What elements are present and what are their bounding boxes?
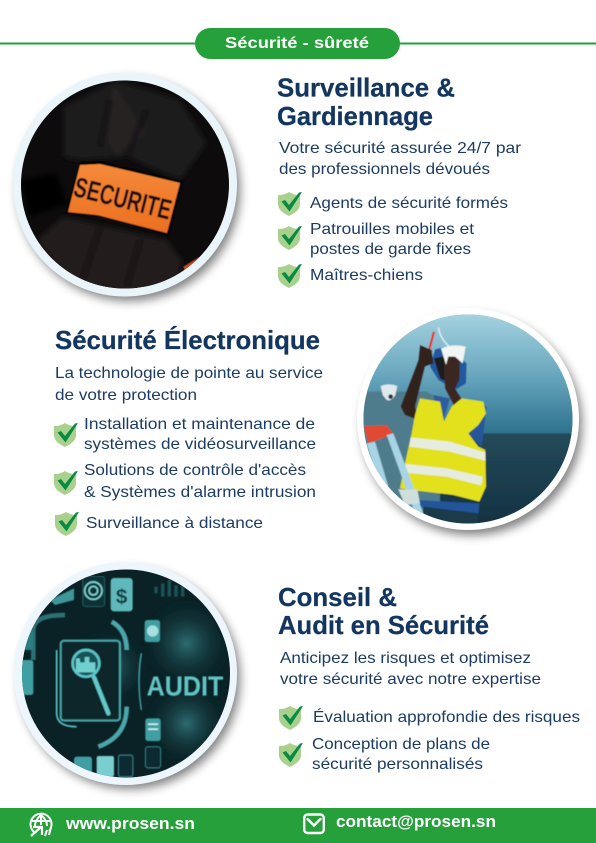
icon: globe <box>31 814 52 836</box>
header pill: Sécurité - sûreté <box>225 35 369 52</box>
icon: envelope <box>304 814 324 833</box>
intro text: votre sécurité avec notre expertise <box>280 671 541 688</box>
bullet: acces: Solutions de contrôle d'accès <box>84 462 306 479</box>
intro text: La technologie de pointe au service <box>55 365 323 382</box>
heading: surveillance: Gardiennage <box>277 101 433 131</box>
text: website: www.prosen.sn <box>65 814 195 833</box>
heading: electronique: Sécurité Électronique <box>55 325 320 355</box>
intro text: Votre sécurité assurée 24/7 par <box>279 140 522 157</box>
bullet: video: systèmes de vidéosurveillance <box>84 436 316 453</box>
bullet: acces <box>84 462 316 501</box>
heading: surveillance <box>277 72 455 131</box>
bullet: maitres-chiens: Maîtres-chiens <box>310 267 423 284</box>
section 2: electronique <box>54 325 323 536</box>
ladder <box>364 425 393 443</box>
photo: security armband <box>13 72 240 301</box>
bullet: evaluation: Évaluation approfondie des risques <box>313 707 580 726</box>
heading: conseil <box>278 582 489 640</box>
intro text <box>280 650 541 688</box>
bullet: agents: Agents de sécurité formés <box>310 195 508 212</box>
magnifier <box>73 650 99 677</box>
text: audit: AUDIT <box>147 671 223 702</box>
text: email: contact@prosen.sn <box>336 812 496 831</box>
icon: shield check <box>54 471 78 495</box>
header rule <box>0 42 596 44</box>
intro text: de votre protection <box>55 387 197 404</box>
bullet: distance: Surveillance à distance <box>86 515 263 532</box>
section 3: conseil <box>278 582 580 773</box>
dashboard tiles <box>111 578 133 611</box>
intro text: des professionnels dévoués <box>279 161 490 178</box>
heading: conseil: Conseil & <box>278 582 397 612</box>
icon: shield check <box>278 192 302 216</box>
helmet <box>430 347 467 390</box>
arms <box>401 345 433 420</box>
icon: shield check <box>279 743 303 767</box>
bullet: conception: sécurité personnalisés <box>312 756 483 773</box>
bullet: patrouilles: postes de garde fixes <box>310 241 471 258</box>
photo: technician installing camera <box>357 308 582 535</box>
bullet: video: Installation et maintenance de <box>84 416 315 433</box>
footer band <box>0 808 596 843</box>
icon: shield check <box>55 512 79 536</box>
icon: shield check <box>278 264 302 288</box>
bullet: conception <box>312 736 490 773</box>
header pill <box>195 28 400 59</box>
photo: security armband: SECURITE <box>71 171 175 226</box>
camera <box>381 384 397 400</box>
bullet: video <box>84 416 316 453</box>
heading: surveillance: Surveillance & <box>277 72 455 102</box>
bullet: patrouilles: Patrouilles mobiles et <box>310 221 475 238</box>
shirt <box>433 395 450 420</box>
icon: shield check <box>279 706 303 730</box>
intro text <box>279 140 522 178</box>
photo: audit dashboard: $ <box>116 585 128 608</box>
vest <box>400 398 486 502</box>
intro text <box>55 365 323 404</box>
icon: shield check <box>54 423 78 447</box>
bullet: patrouilles <box>310 221 475 258</box>
section 1: surveillance <box>277 72 522 288</box>
photo: audit dashboard <box>14 562 240 789</box>
bullet: acces: & Systèmes d'alarme intrusion <box>84 484 316 501</box>
bullet: conception: Conception de plans de <box>312 736 490 753</box>
wire <box>438 327 449 347</box>
icon: shield check <box>278 226 302 250</box>
heading: conseil: Audit en Sécurité <box>278 610 489 640</box>
intro text: Anticipez les risques et optimisez <box>280 650 531 667</box>
frame <box>61 641 120 721</box>
